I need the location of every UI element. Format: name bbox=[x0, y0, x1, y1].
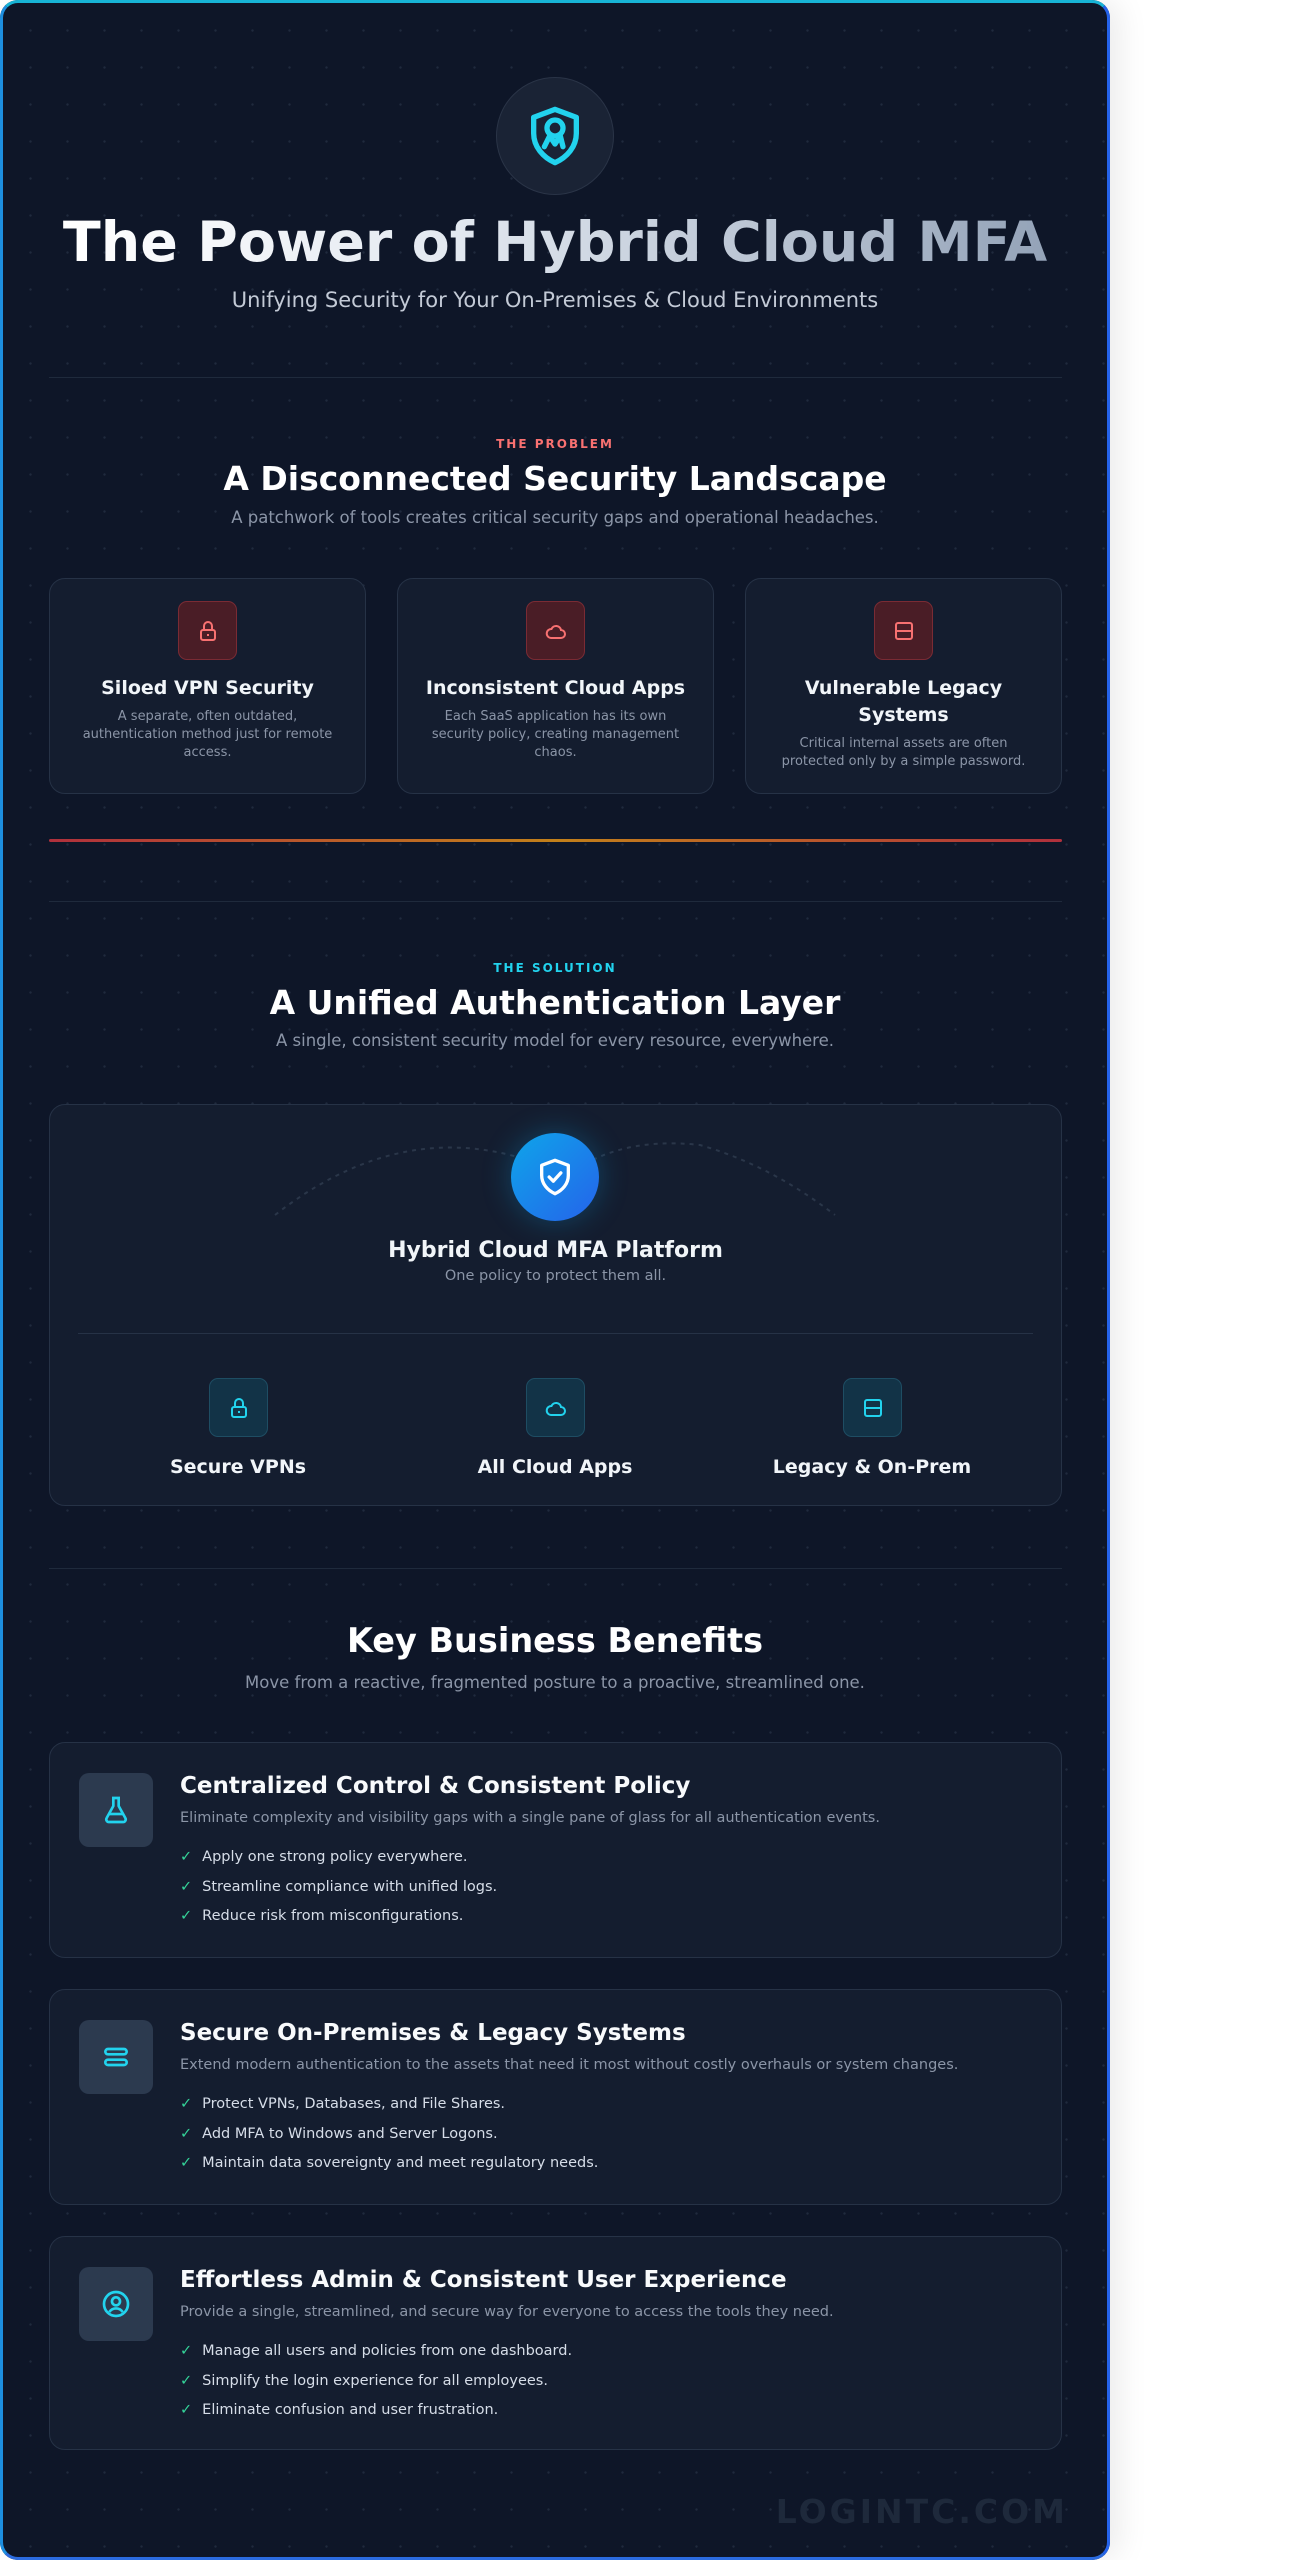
benefit: admin: Effortless Admin & Consistent User Experience bbox=[180, 2267, 787, 2293]
target: cloud: All Cloud Apps bbox=[478, 1456, 632, 1478]
target: vpn: Secure VPNs bbox=[170, 1456, 306, 1478]
benefit: admin: ✓ Manage all users and policies from one dashboard. bbox=[180, 2343, 572, 2359]
card title bbox=[805, 677, 1002, 726]
card title: Systems bbox=[858, 704, 949, 726]
subtitle: Unifying Security for Your On-Premises & Cloud Environments bbox=[232, 288, 878, 312]
card title: Siloed VPN Security bbox=[101, 677, 314, 699]
dashed arcs bbox=[274, 1142, 836, 1216]
icon: servers bbox=[79, 2020, 153, 2094]
title: The Power of Hybrid Cloud MFA bbox=[63, 210, 1047, 275]
card title: Inconsistent Cloud Apps bbox=[426, 677, 685, 699]
benefits subheading: Move from a reactive, fragmented posture to a proactive, streamlined one. bbox=[245, 1673, 865, 1692]
benefit: admin: ✓ Simplify the login experience for all employees. bbox=[180, 2372, 548, 2388]
card text: A separate, often outdated, authentication method just for remote access. bbox=[83, 709, 332, 760]
benefit: admin: Provide a single, streamlined, and secure way for everyone to access the tools they need. bbox=[180, 2304, 834, 2320]
solution label: THE SOLUTION bbox=[493, 961, 617, 975]
panel: siloed vpn bbox=[49, 578, 366, 794]
panel: legacy bbox=[745, 578, 1062, 794]
header icon bbox=[496, 77, 614, 195]
problem subheading: A patchwork of tools creates critical security gaps and operational headaches. bbox=[231, 508, 879, 527]
platform subtitle: One policy to protect them all. bbox=[445, 1268, 666, 1284]
card text: Each SaaS application has its own security policy, creating management chaos. bbox=[432, 709, 679, 760]
icon: server bbox=[874, 601, 933, 660]
benefit: centralized: Eliminate complexity and visibility gaps with a single pane of glass for all authentication events. bbox=[180, 1810, 880, 1826]
benefit: on-prem: Extend modern authentication to the assets that need it most without costly overhauls or system changes. bbox=[180, 2057, 958, 2073]
platform icon bbox=[511, 1133, 599, 1221]
benefit: centralized: ✓ Apply one strong policy everywhere. bbox=[180, 1849, 467, 1865]
watermark: LOGINTC.COM bbox=[776, 2492, 1068, 2531]
benefit: on-prem: ✓ Maintain data sovereignty and meet regulatory needs. bbox=[180, 2155, 598, 2171]
problem heading: A Disconnected Security Landscape bbox=[223, 459, 887, 498]
problem label: THE PROBLEM bbox=[496, 437, 614, 451]
benefit: admin bbox=[49, 2236, 1062, 2450]
benefit: admin: ✓ Eliminate confusion and user frustration. bbox=[180, 2402, 498, 2418]
benefit: on-prem: ✓ Add MFA to Windows and Server Logons. bbox=[180, 2126, 498, 2142]
benefits heading: Key Business Benefits bbox=[347, 1621, 763, 1660]
target: legacy: Legacy & On-Prem bbox=[773, 1456, 971, 1478]
panel: solution diagram bbox=[49, 1104, 1062, 1506]
card title: Vulnerable Legacy bbox=[805, 677, 1002, 699]
icon: lock bbox=[178, 601, 237, 660]
panel: cloud apps bbox=[397, 578, 714, 794]
benefit: centralized bbox=[49, 1742, 1062, 1958]
solution subheading: A single, consistent security model for every resource, everywhere. bbox=[276, 1031, 834, 1050]
card text: Critical internal assets are often protected only by a simple password. bbox=[782, 736, 1025, 769]
benefit: on-prem bbox=[49, 1989, 1062, 2205]
platform title: Hybrid Cloud MFA Platform bbox=[388, 1238, 723, 1263]
icon: user bbox=[79, 2267, 153, 2341]
benefit: centralized: Centralized Control & Consistent Policy bbox=[180, 1773, 690, 1799]
icon: cloud bbox=[526, 601, 585, 660]
benefit: on-prem: ✓ Protect VPNs, Databases, and File Shares. bbox=[180, 2096, 505, 2112]
target: legacy bbox=[773, 1378, 971, 1478]
icon: flask bbox=[79, 1773, 153, 1847]
target: cloud bbox=[478, 1378, 632, 1478]
benefit: centralized: ✓ Streamline compliance with unified logs. bbox=[180, 1878, 497, 1894]
benefit: centralized: ✓ Reduce risk from misconfigurations. bbox=[180, 1908, 463, 1924]
benefit: on-prem: Secure On-Premises & Legacy Systems bbox=[180, 2020, 686, 2046]
target: vpn bbox=[170, 1378, 306, 1478]
solution heading: A Unified Authentication Layer bbox=[270, 983, 840, 1022]
